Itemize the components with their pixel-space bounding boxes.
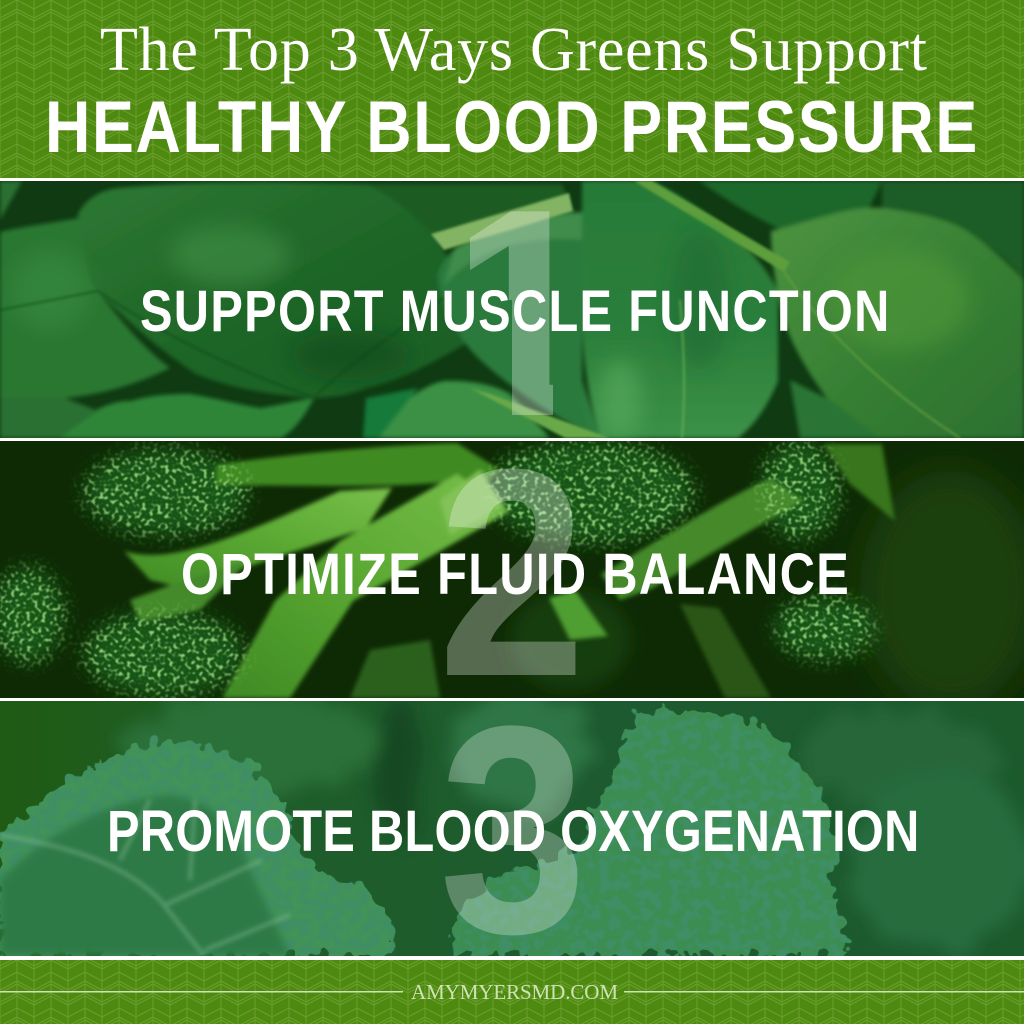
kale midrib xyxy=(0,800,290,956)
header band xyxy=(0,0,1024,178)
kale leaf body xyxy=(0,795,290,956)
leaf stems xyxy=(431,181,790,438)
leaf highlights xyxy=(10,225,970,440)
dark right foliage xyxy=(860,470,1024,710)
footer url: AMYMYERSMD.COM xyxy=(411,980,618,1004)
heading: optimize fluid balance: OPTIMIZE FLUID BALANCE xyxy=(181,543,849,607)
spinach leaves xyxy=(0,181,1024,438)
panel 2: broccoli, optimize fluid balance xyxy=(0,440,1024,710)
panel 1: spinach, support muscle function xyxy=(0,181,1024,440)
broccoli florets xyxy=(0,440,875,696)
blurred kale background xyxy=(120,690,1024,950)
large numeral 3: 3 xyxy=(439,664,587,995)
large numeral 2: 2 xyxy=(438,407,586,738)
large numeral 1: 1 xyxy=(440,147,604,478)
kale leaves xyxy=(0,710,850,956)
title line: The Top 3 Ways Greens Support: The Top 3 Ways Greens Support xyxy=(100,16,927,84)
heading: promote blood oxygenation: PROMOTE BLOOD OXYGENATION xyxy=(107,800,919,864)
panel 3: kale, promote blood oxygenation xyxy=(0,690,1024,956)
footer band xyxy=(0,960,1024,1024)
title line: Healthy Blood Pressure: HEALTHY BLOOD PRESSURE xyxy=(45,87,977,168)
heading: support muscle function: SUPPORT MUSCLE FUNCTION xyxy=(140,280,889,344)
floret shadows xyxy=(0,442,875,696)
broccoli stems xyxy=(124,443,895,698)
